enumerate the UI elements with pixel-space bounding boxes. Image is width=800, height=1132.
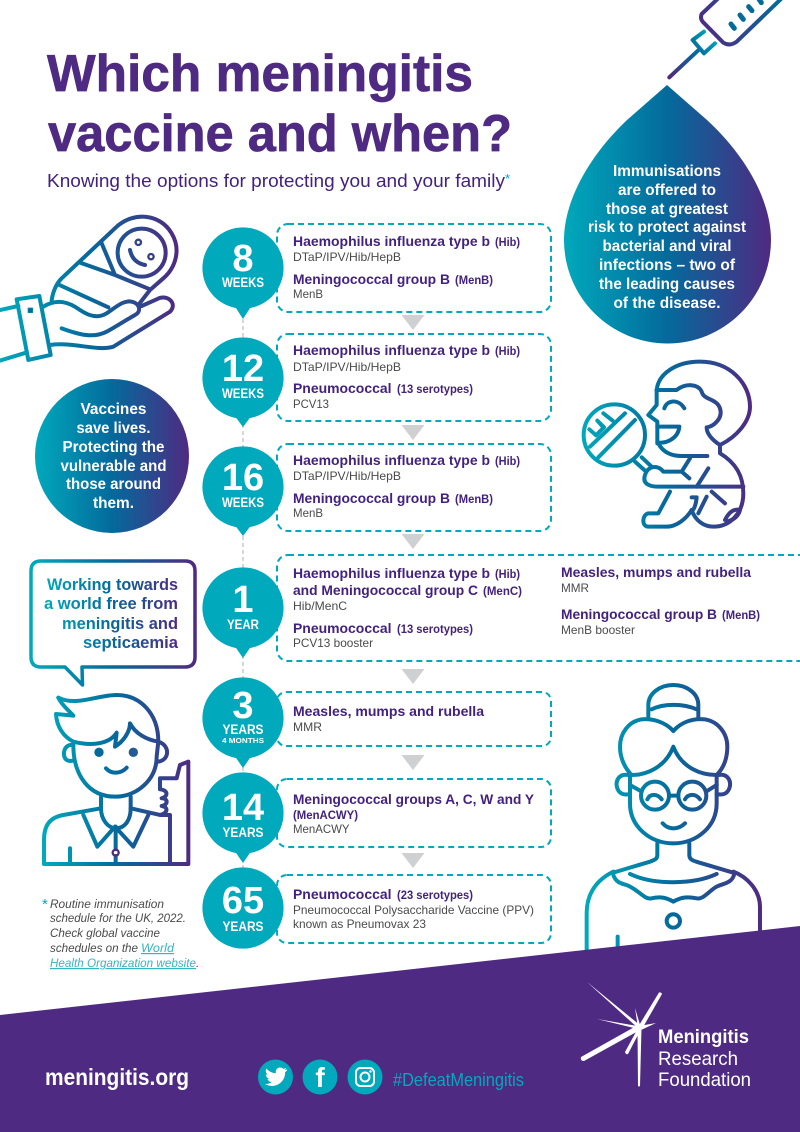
panel: 16 weeks vaccines: (Hib)	[495, 456, 520, 468]
panel: immunisation drop: bacterial and viral	[602, 238, 732, 255]
logo: Meningitis Research Foundation: Meningitis	[658, 1027, 749, 1048]
panel: 1 year vaccines: Meningococcal group B	[561, 606, 717, 622]
panel: 65 years vaccines: Pneumococcal Polysaccharide Vaccine (PPV)	[293, 903, 534, 917]
panel: 65 years vaccines: Pneumococcal	[293, 886, 392, 902]
pin: 12 weeks: WEEKS	[222, 386, 264, 401]
callout: vaccines save lives	[35, 379, 189, 533]
callout: vaccines save lives: those around	[66, 476, 161, 493]
icon: grandmother	[587, 685, 760, 957]
callout: speech bubble	[31, 561, 195, 685]
panel: 8 weeks vaccines: Haemophilus influenza type b	[293, 233, 490, 249]
footnote	[42, 896, 199, 970]
pin: 1 year: 1	[232, 579, 254, 621]
pin: 3 years 4 months	[202, 677, 284, 768]
pin: 3 years 4 months: 4 MONTHS	[222, 736, 264, 745]
panel: immunisation drop	[564, 85, 771, 344]
icon: twitter	[258, 1060, 293, 1094]
callout: vaccines save lives: Vaccines	[80, 401, 146, 418]
pin: 1 year: YEAR	[227, 617, 259, 632]
arrow	[402, 755, 424, 770]
hashtag: #DefeatMeningitis	[393, 1070, 524, 1090]
panel: 3 years vaccines: MMR	[293, 720, 322, 734]
pin: 8 weeks: WEEKS	[222, 275, 264, 290]
panel: 65 years vaccines: known as Pneumovax 23	[293, 917, 426, 931]
footer band	[0, 926, 800, 1132]
panel: 65 years vaccines: (23 serotypes)	[397, 890, 473, 902]
footnote: schedule for the UK, 2022.	[50, 911, 186, 925]
panel: 1 year vaccines: Haemophilus influenza type b	[293, 565, 490, 581]
icon: baby with rattle	[584, 362, 750, 527]
callout: speech bubble: septicaemia	[83, 633, 179, 652]
panel: 14 years vaccines: Meningococcal groups A, C, W and Y	[293, 791, 535, 807]
panel: 16 weeks vaccines: MenB	[293, 506, 323, 520]
panel: immunisation drop: risk to protect against	[588, 219, 746, 236]
pin: 8 weeks: 8	[232, 238, 254, 280]
pin: 65 years: 65	[222, 880, 264, 922]
panel: 65 years vaccines	[277, 875, 551, 943]
pin: 16 weeks: WEEKS	[222, 495, 264, 510]
arrow	[402, 425, 424, 440]
arrow	[402, 669, 424, 684]
footnote: *	[42, 896, 48, 913]
icon: instagram	[348, 1060, 382, 1094]
panel: 16 weeks vaccines: Haemophilus influenza type b	[293, 452, 490, 468]
panel: immunisation drop: infections – two of	[599, 257, 736, 274]
icon: syringe	[669, 0, 782, 77]
footnote: World	[141, 941, 174, 955]
icon: man with thumbs up	[44, 695, 188, 864]
panel: 8 weeks vaccines: (MenB)	[455, 275, 493, 287]
footnote: Routine immunisation	[50, 897, 164, 911]
callout: vaccines save lives: Protecting the	[62, 439, 165, 456]
panel: 14 years vaccines	[277, 779, 551, 847]
panel: 1 year vaccines: Hib/MenC	[293, 599, 347, 613]
panel: 8 weeks vaccines: MenB	[293, 287, 323, 301]
panel: 1 year vaccines: Pneumococcal	[293, 620, 392, 636]
arrow	[402, 315, 424, 330]
callout: vaccines save lives: them.	[93, 495, 134, 512]
subtitle: Knowing the options for protecting you and your family	[47, 170, 506, 191]
footnote: Check global vaccine	[50, 926, 160, 940]
footnote: schedules on the	[50, 941, 138, 955]
panel: 16 weeks vaccines: Meningococcal group B	[293, 490, 450, 506]
arrow	[402, 853, 424, 868]
title: vaccine and when?	[48, 105, 512, 163]
callout: speech bubble: Working towards	[47, 575, 178, 594]
panel: 1 year vaccines: (MenC)	[483, 586, 522, 598]
footnote: .	[196, 956, 199, 970]
icon: facebook: f	[315, 1062, 325, 1093]
callout: vaccines save lives: vulnerable and	[60, 458, 166, 475]
icon: baby in hand	[0, 217, 177, 361]
panel: 12 weeks vaccines: (13 serotypes)	[397, 384, 473, 396]
pin: 16 weeks	[202, 446, 284, 536]
icon: facebook	[302, 1060, 338, 1094]
timeline connector	[242, 319, 244, 870]
panel: immunisation drop: are offered to	[618, 182, 716, 199]
pin: 12 weeks: 12	[222, 348, 264, 390]
footnote: Health Organization website	[50, 956, 196, 970]
panel: 1 year vaccines: and Meningococcal group C	[293, 582, 478, 598]
pin: 3 years 4 months: YEARS	[222, 722, 264, 737]
panel: 8 weeks vaccines: (Hib)	[495, 237, 520, 249]
pin: 8 weeks	[202, 227, 284, 319]
pin: 14 years: YEARS	[222, 825, 264, 840]
panel: immunisation drop: the leading causes	[599, 276, 735, 293]
panel: 8 weeks vaccines: DTaP/IPV/Hib/HepB	[293, 250, 401, 264]
callout: vaccines save lives: save lives.	[76, 420, 150, 437]
panel: 12 weeks vaccines: DTaP/IPV/Hib/HepB	[293, 360, 401, 374]
logo: Meningitis Research Foundation: Research	[658, 1048, 738, 1070]
pin: 12 weeks	[202, 337, 284, 427]
pin: 1 year	[202, 567, 284, 658]
panel: 8 weeks vaccines: Meningococcal group B	[293, 271, 450, 287]
panel: 1 year vaccines: MenB booster	[561, 623, 635, 637]
logo: Meningitis Research Foundation	[581, 982, 751, 1091]
panel: 12 weeks vaccines	[277, 334, 551, 421]
subtitle: *	[505, 171, 510, 186]
title	[47, 45, 512, 163]
panel: 16 weeks vaccines: DTaP/IPV/Hib/HepB	[293, 469, 401, 483]
panel: immunisation drop: Immunisations	[613, 163, 721, 180]
logo: Meningitis Research Foundation: Foundation	[658, 1069, 751, 1091]
panel: 1 year vaccines: MMR	[561, 581, 589, 595]
pin: 16 weeks: 16	[222, 457, 264, 499]
panel: 1 year vaccines	[277, 555, 800, 661]
panel: 12 weeks vaccines: (Hib)	[495, 346, 520, 358]
title: Which meningitis	[47, 45, 473, 103]
pin: 65 years	[202, 867, 284, 949]
panel: 1 year vaccines: (13 serotypes)	[397, 624, 473, 636]
panel: 12 weeks vaccines: Pneumococcal	[293, 380, 392, 396]
arrow	[402, 534, 424, 549]
callout: speech bubble: meningitis and	[62, 614, 178, 633]
panel: 1 year vaccines: (MenB)	[722, 610, 760, 622]
pin: 14 years: 14	[222, 787, 264, 829]
panel: 12 weeks vaccines: Haemophilus influenza type b	[293, 342, 490, 358]
panel: 16 weeks vaccines	[277, 444, 551, 531]
pin: 3 years 4 months: 3	[232, 685, 254, 727]
website link: meningitis.org	[45, 1064, 189, 1090]
panel: immunisation drop: those at greatest	[606, 201, 728, 218]
panel: immunisation drop: of the disease.	[614, 295, 720, 312]
panel: 3 years vaccines	[277, 692, 551, 746]
panel: 14 years vaccines: MenACWY	[293, 822, 350, 836]
pin: 65 years: YEARS	[222, 919, 264, 934]
pin: 14 years	[202, 772, 284, 863]
panel: 1 year vaccines: Measles, mumps and rubella	[561, 564, 751, 580]
panel: 12 weeks vaccines: PCV13	[293, 397, 329, 411]
panel: 3 years vaccines: Measles, mumps and rubella	[293, 703, 484, 719]
panel: 8 weeks vaccines	[277, 224, 551, 312]
panel: 1 year vaccines: PCV13 booster	[293, 636, 373, 650]
panel: 16 weeks vaccines: (MenB)	[455, 494, 493, 506]
panel: 14 years vaccines: (MenACWY)	[293, 810, 358, 822]
panel: 1 year vaccines: (Hib)	[495, 569, 520, 581]
callout: speech bubble: a world free from	[44, 594, 178, 613]
